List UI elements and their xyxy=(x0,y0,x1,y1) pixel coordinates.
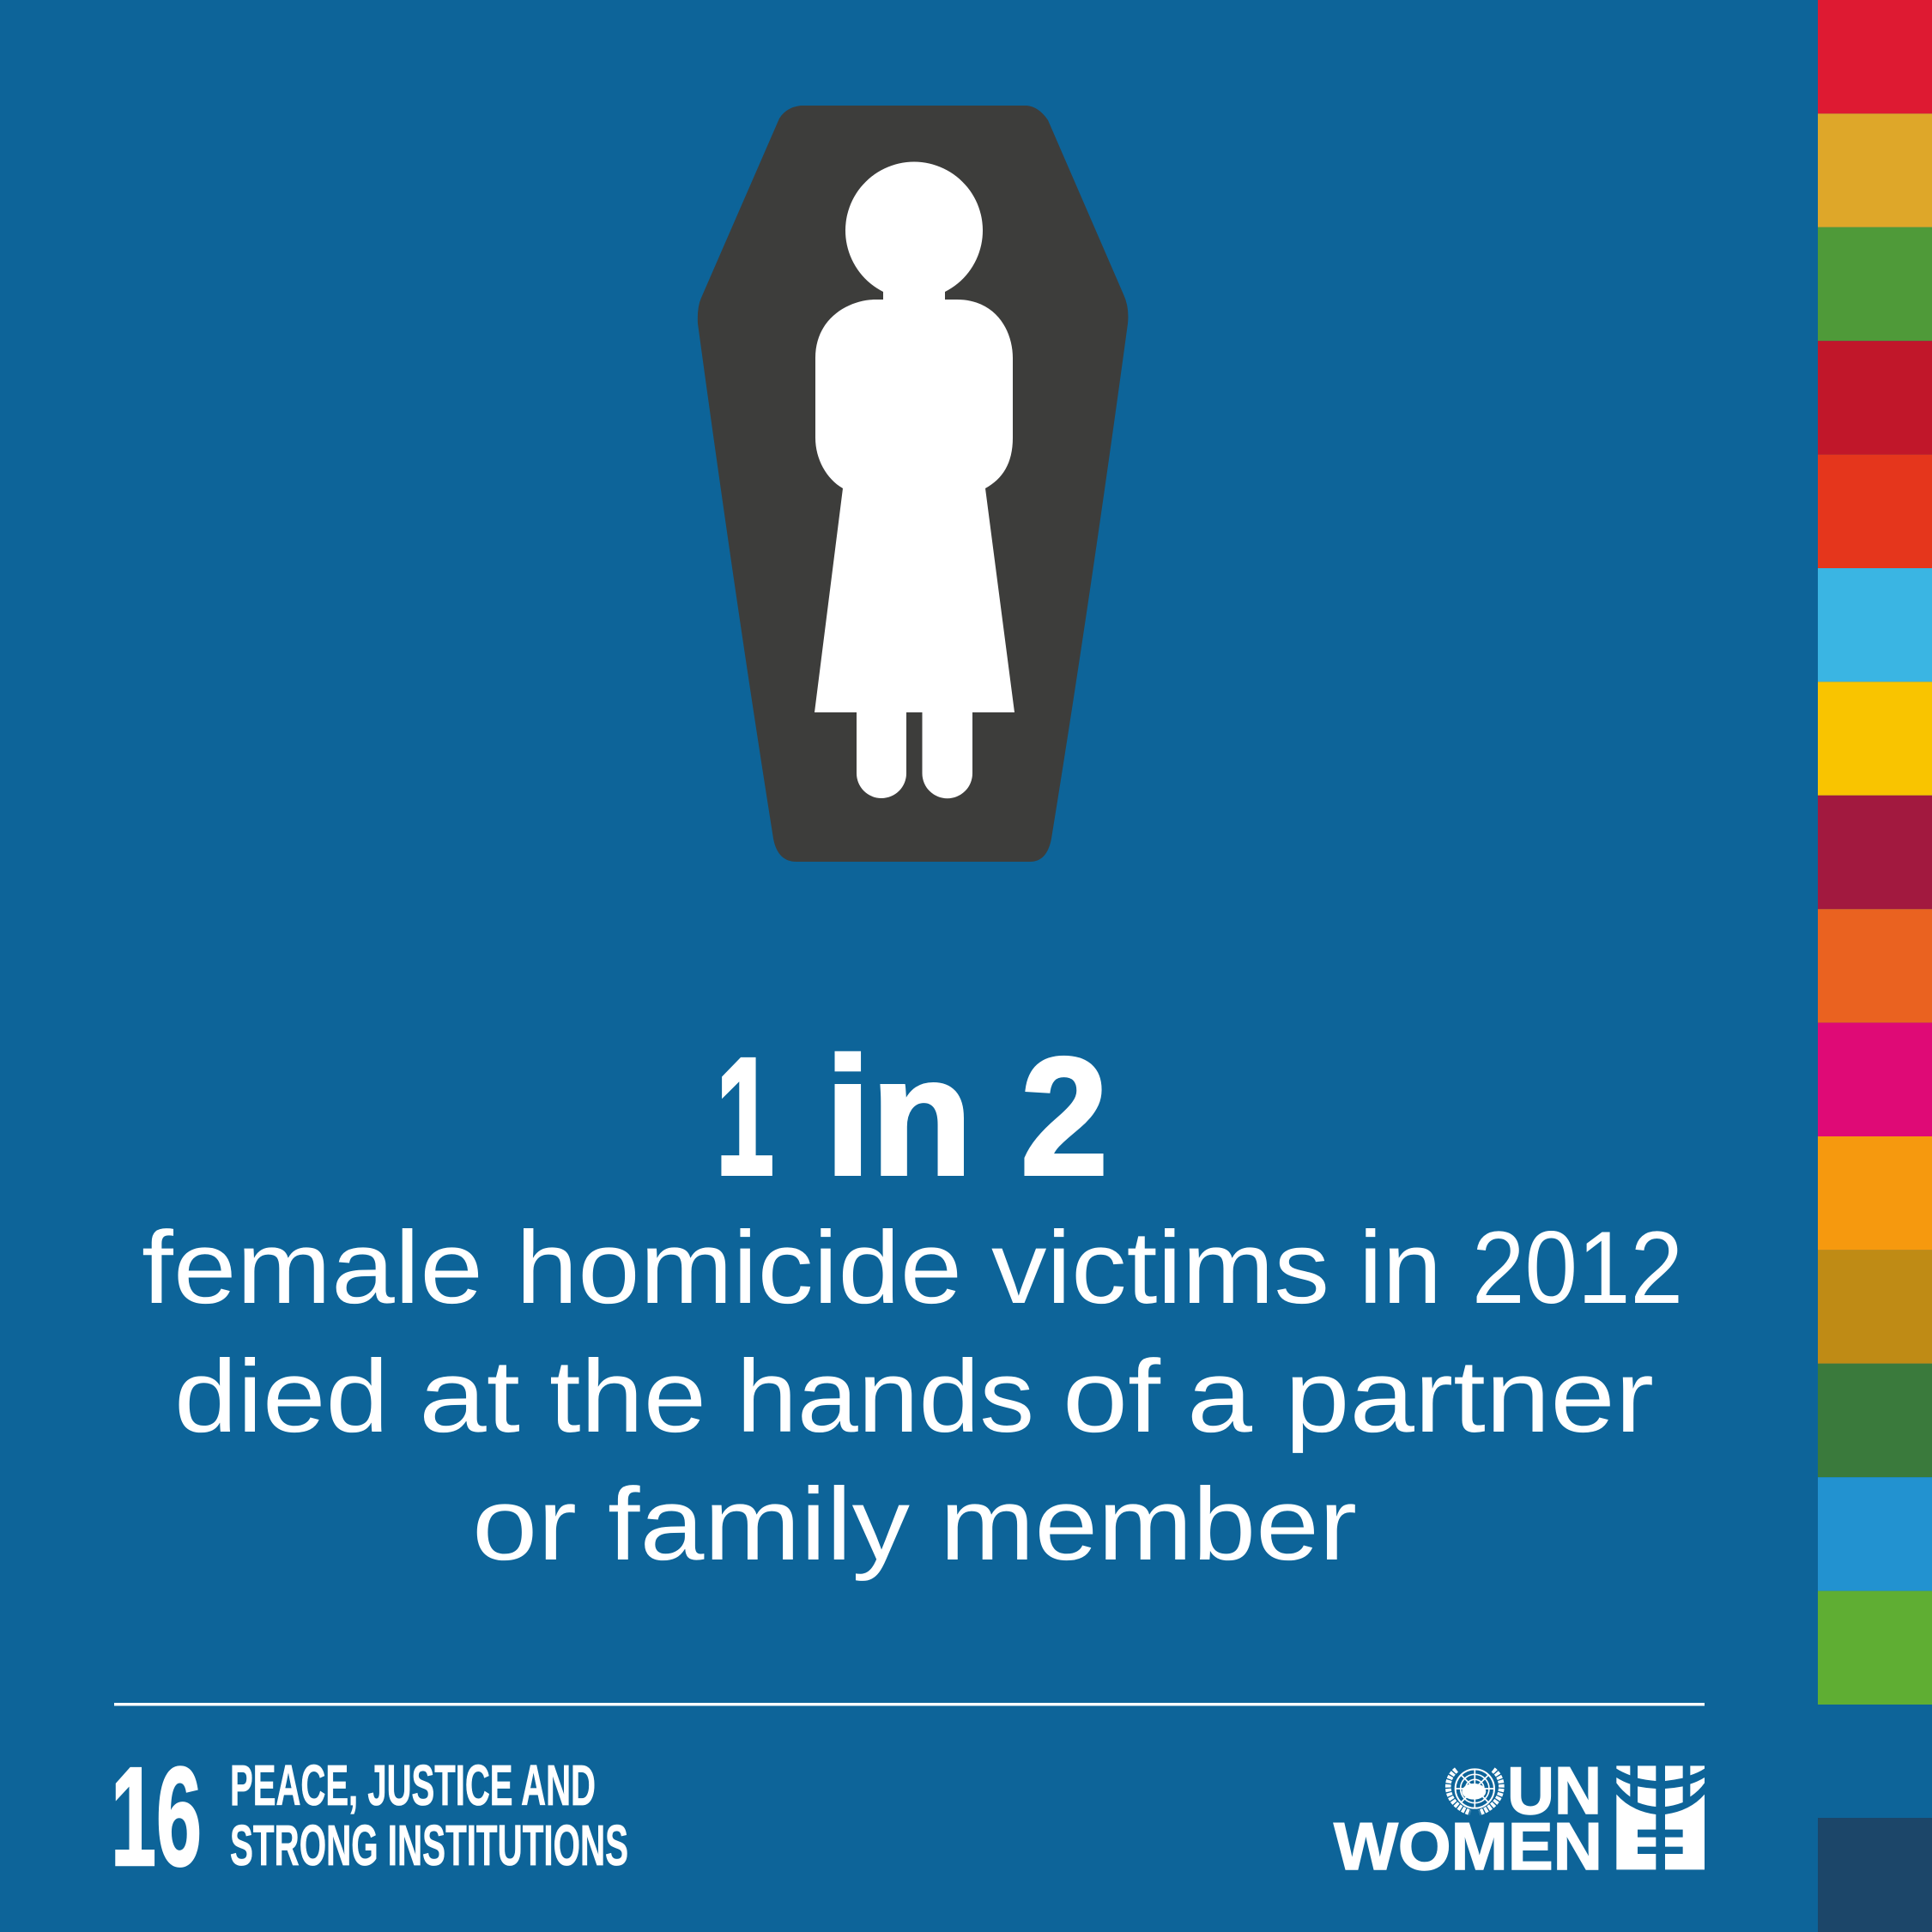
coffin xyxy=(698,106,1128,862)
logo wordmark xyxy=(1334,1753,1602,1884)
icon: UN emblem xyxy=(1448,1769,1501,1813)
statement text: hands xyxy=(736,1339,1034,1454)
statement text xyxy=(142,1210,1683,1582)
UN Women logo xyxy=(1334,1753,1705,1884)
statement text: homicide xyxy=(516,1210,962,1325)
statement text: died xyxy=(174,1339,389,1454)
statement text: or xyxy=(472,1467,577,1582)
statement text: in xyxy=(1359,1210,1442,1325)
icon: coffin with female figure xyxy=(698,106,1128,862)
headline statistic: 2 xyxy=(1021,1023,1108,1210)
headline statistic xyxy=(716,1023,1108,1210)
goal number: 16 xyxy=(111,1738,202,1895)
statement text: a xyxy=(1187,1339,1252,1454)
icon: UN Women mark xyxy=(1616,1765,1705,1869)
goal title: PEACE, JUSTICE AND xyxy=(230,1753,596,1818)
statement text: at xyxy=(419,1339,520,1454)
headline statistic: in xyxy=(825,1023,972,1210)
statement text: partner xyxy=(1285,1339,1654,1454)
headline statistic: 1 xyxy=(716,1023,774,1210)
statement text: member xyxy=(940,1467,1357,1582)
logo wordmark: UN xyxy=(1507,1753,1602,1828)
statement text: 2012 xyxy=(1472,1210,1683,1325)
SDG 16 label xyxy=(111,1738,628,1895)
statement text: family xyxy=(608,1467,910,1582)
statement text: victims xyxy=(991,1210,1329,1325)
female figure xyxy=(815,162,1014,798)
SDG 16 label: STRONG INSTITUTIONS xyxy=(230,1814,628,1878)
SDG colour strip xyxy=(1818,0,1932,1932)
statement text: female xyxy=(142,1210,483,1325)
statement text: the xyxy=(549,1339,706,1454)
statement text: of xyxy=(1063,1339,1161,1454)
logo wordmark: WOMEN xyxy=(1334,1808,1602,1884)
